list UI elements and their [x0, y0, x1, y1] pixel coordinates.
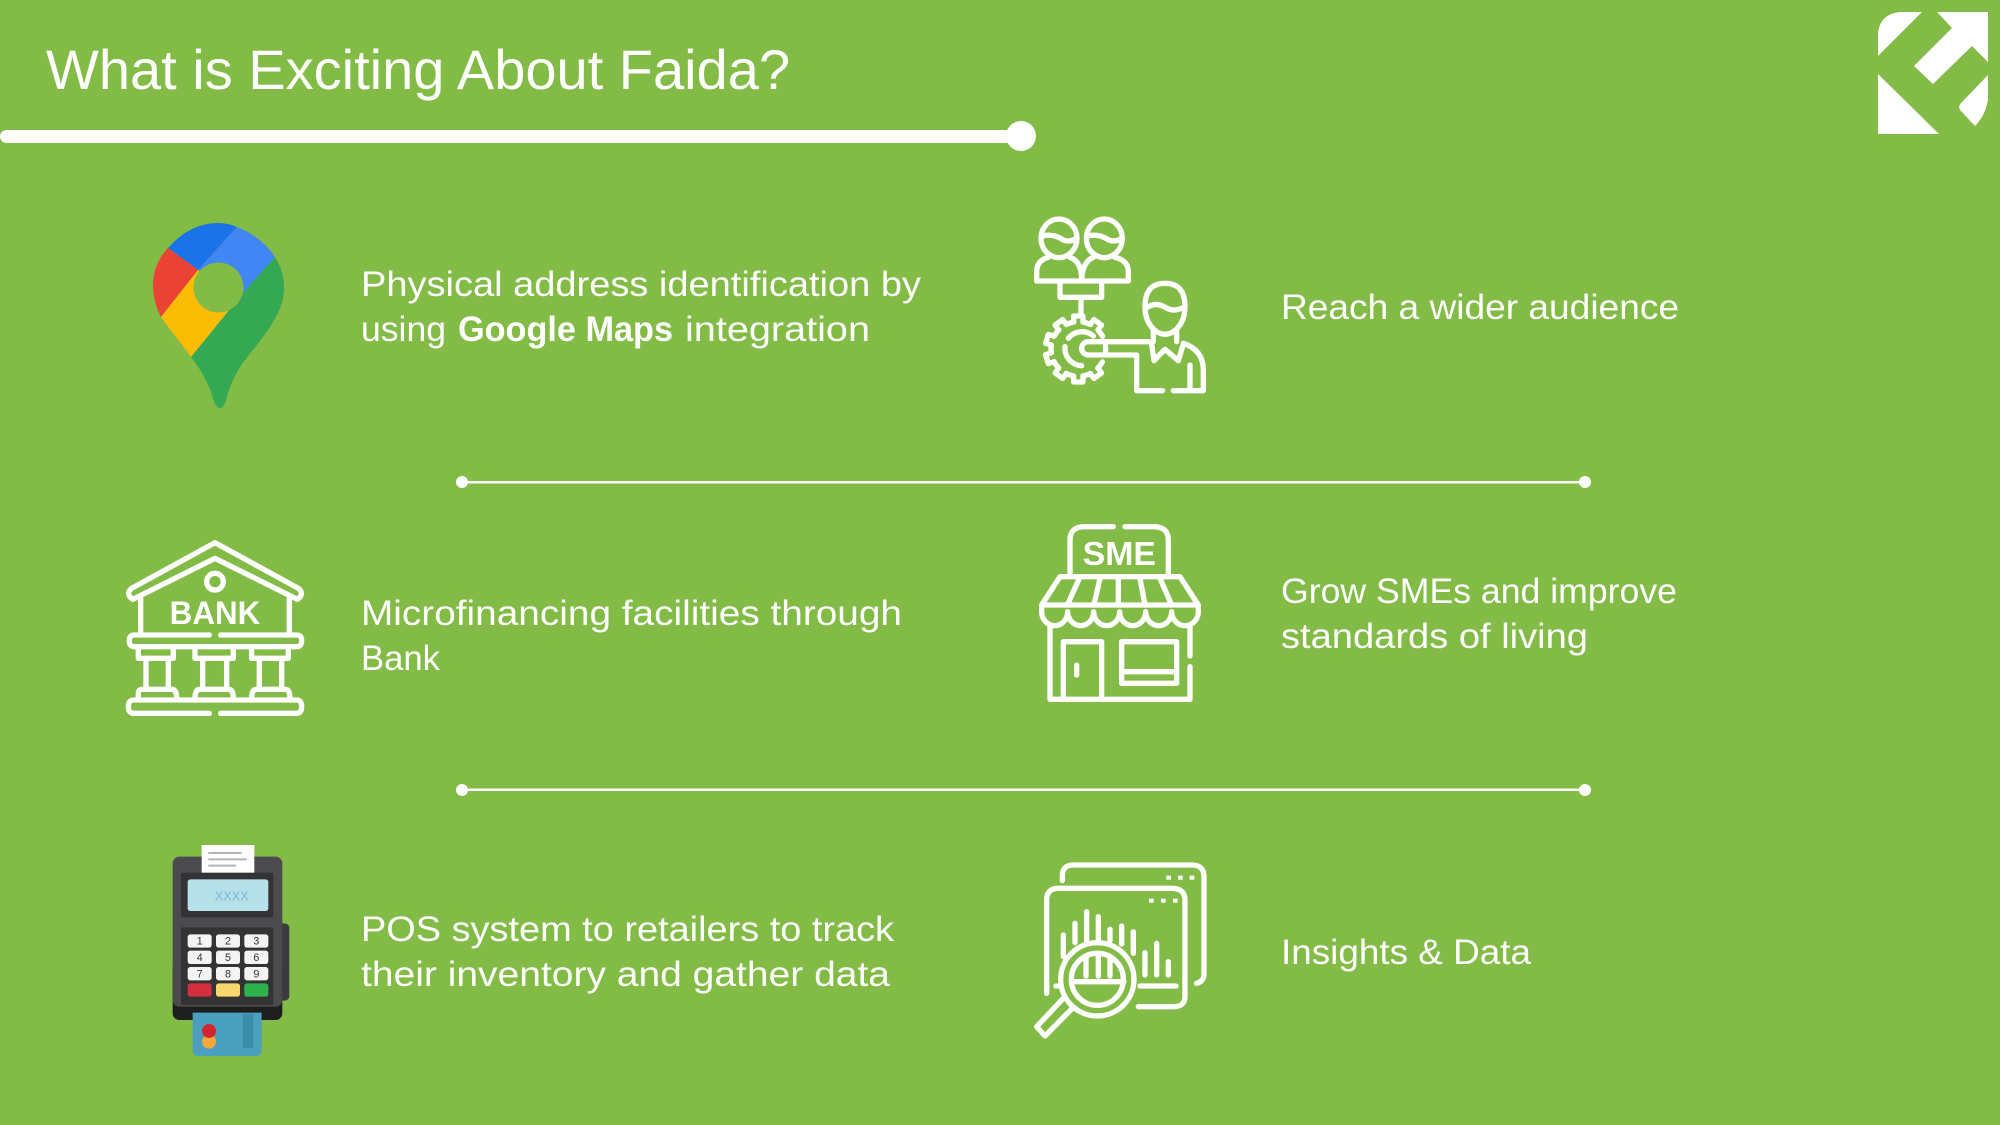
icon: pos terminal: 9	[253, 968, 259, 980]
logo	[1878, 12, 1988, 134]
icon: pos terminal: 2	[225, 936, 231, 948]
icon: pos terminal	[173, 845, 289, 1056]
title underline bar	[0, 121, 1036, 151]
text: bank	[361, 594, 902, 678]
icon: pos terminal: 7	[197, 968, 203, 980]
text: insights: Insights & Data	[1281, 933, 1532, 972]
divider 1	[456, 476, 1591, 488]
text: pos: their inventory and gather data	[361, 955, 891, 994]
text: reach: Reach a wider audience	[1281, 288, 1679, 327]
icon: data insights	[1037, 865, 1204, 1036]
text: google maps	[361, 265, 922, 349]
text: bank: Microfinancing facilities through	[361, 594, 902, 633]
text: pos	[361, 910, 895, 994]
icon: google maps pin	[153, 223, 284, 408]
text: google maps: using	[361, 310, 446, 349]
text: sme: Grow SMEs and improve	[1281, 572, 1677, 611]
icon: people and gear	[1037, 219, 1203, 391]
icon: pos terminal: 1	[197, 936, 203, 948]
text: google maps: Physical address identification by	[361, 265, 922, 304]
icon: sme shop	[1042, 527, 1198, 699]
text: google maps: Google Maps	[458, 310, 673, 349]
icon: pos terminal: 8	[225, 968, 231, 980]
divider 2	[456, 784, 1591, 796]
icon: bank	[128, 543, 302, 713]
icon: pos terminal: XXXX	[215, 890, 249, 904]
text: sme	[1281, 572, 1677, 656]
icon: pos terminal: 5	[225, 952, 231, 964]
text: bank: Bank	[361, 639, 440, 678]
icon: bank: BANK	[170, 594, 261, 631]
icon: pos terminal: 6	[253, 952, 259, 964]
title: What is Exciting About Faida?	[46, 38, 790, 101]
text: google maps: integration	[685, 310, 870, 349]
text: sme: standards of living	[1281, 617, 1588, 656]
icon: pos terminal: 3	[253, 936, 259, 948]
icon: sme shop: SME	[1083, 536, 1156, 573]
icon: pos terminal: 4	[197, 952, 203, 964]
text: pos: POS system to retailers to track	[361, 910, 895, 949]
